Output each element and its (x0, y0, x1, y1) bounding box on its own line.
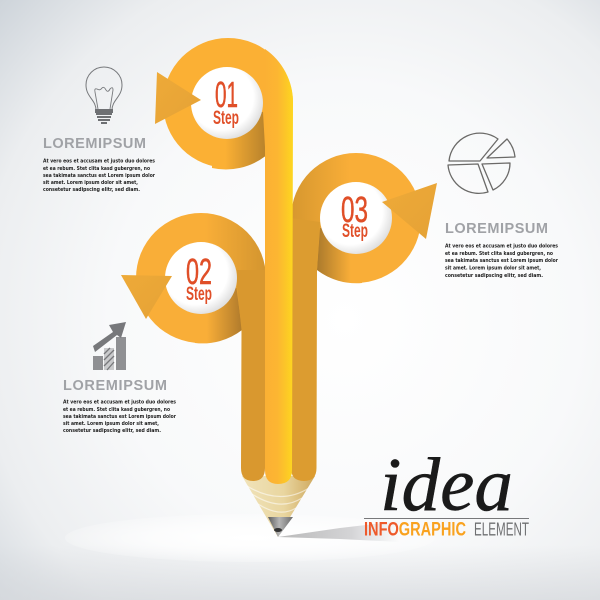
text block: left lower: sit amet. Lorem ipsum dolor sit amet, (63, 421, 159, 427)
arrow: step 01 (155, 72, 201, 124)
step 03 badge (320, 182, 392, 254)
heading: right: LOREMIPSUM (445, 221, 548, 237)
text block: right: sea takimata sanctus est Lorem ipsum dolor (445, 258, 558, 264)
text block: right: sit amet. Lorem ipsum dolor sit amet, (445, 266, 541, 272)
arrow: step 02 (121, 275, 172, 319)
step 03 badge: 03 (341, 189, 368, 230)
step 02 badge (165, 242, 237, 314)
text block: left top: et ea rebum. Stet clita kasd gubergren, no (43, 166, 150, 172)
floor ellipse (65, 514, 435, 562)
step 01 badge: 01 (215, 74, 238, 115)
text block: left top (43, 158, 155, 193)
heading: left lower: LOREMIPSUM (63, 378, 167, 394)
heading: left top: LOREMIPSUM (43, 136, 146, 152)
subtitle: infographic element: ELEMENT (474, 520, 529, 540)
icon: light bulb (86, 67, 122, 123)
text block: right: et ea rebum. Stet clita kasd gubergren, no (445, 251, 553, 257)
text block: left lower: et ea rebum. Stet clita kasd gubergren, no (63, 407, 170, 413)
icon: pie chart (448, 133, 515, 193)
step 03 loop (291, 153, 421, 481)
text block: right: At vero eos et accusam et justo duo dolores (445, 244, 558, 250)
step 02 badge: Step (186, 284, 212, 305)
text block: left lower: At vero eos et accusam et justo duo dolores (63, 400, 176, 406)
pencil with three step loops (121, 38, 437, 537)
step 02 loop (136, 213, 266, 481)
text block: left top: sea takimata sanctus est Lorem ipsum dolor (43, 173, 155, 179)
text block: right (445, 244, 558, 279)
step 01 badge (191, 67, 263, 139)
text block: left top: At vero eos et accusam et justo duo dolores (43, 158, 155, 164)
pencil wood tip (242, 476, 315, 537)
title: idea: idea (380, 443, 513, 527)
step 01 loop (163, 38, 293, 484)
pencil shadow (278, 521, 400, 542)
text block: right: consetetur sadipscing elitr, sed diam. (445, 273, 543, 279)
text block: left lower: consetetur sadipscing elitr, sed diam. (63, 428, 161, 434)
subtitle: infographic element (364, 518, 529, 540)
text block: left lower: sea takimata sanctus est Lorem ipsum dolor (63, 414, 176, 420)
text block: left top: sit amet. Lorem ipsum dolor sit amet, (43, 180, 138, 186)
step 01 badge: Step (213, 108, 239, 129)
text block: left top: consetetur sadipscing elitr, sed diam. (43, 187, 140, 193)
step 03 badge: Step (342, 221, 368, 242)
step 02 badge: 02 (186, 251, 212, 292)
background lower fade (0, 545, 600, 600)
arrow: step 03 (382, 183, 437, 239)
icon: bar chart with arrow (93, 322, 126, 370)
subtitle: infographic element: INFOGRAPHIC (364, 520, 466, 540)
text block: left lower (63, 400, 176, 434)
